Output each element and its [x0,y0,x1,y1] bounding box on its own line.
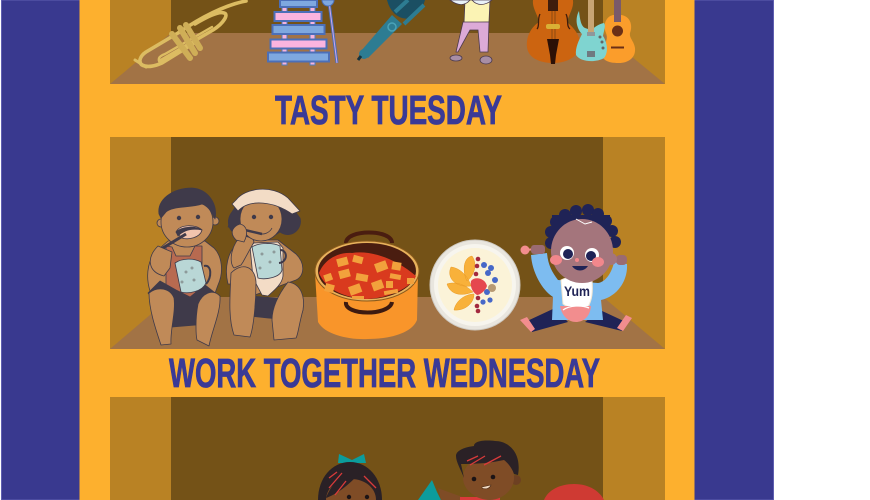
yellow bookcase frame [80,0,694,500]
icon: xylophone [268,0,337,65]
icon: double bass [527,0,580,64]
illustration: teal triangle block [418,480,441,500]
icon: microphone [358,0,425,60]
icon: trumpet [135,1,246,67]
icon: electric guitar [576,0,607,61]
panel: top shelf [110,0,665,84]
illustration: child with red hair [544,484,604,500]
heading: Work Together Wednesday: WORK TOGETHER WEDNESDAY [169,350,600,396]
illustration: baby with bib saying Yum [520,204,632,332]
heading: Tasty Tuesday: TASTY TUESDAY [275,87,502,133]
icon: bowl of porridge with fruit [430,240,520,330]
icon: pot of stew [315,232,419,339]
icon: child playing an instrument [450,0,492,64]
illustration: boy eating [148,188,221,346]
illustration: girl eating [226,189,304,340]
illustration: boy with dark hair [438,441,521,500]
illustration: girl with teal bow [318,454,382,500]
panel: middle shelf [110,137,665,349]
illustration: baby with bib saying Yum: Yum [564,283,590,299]
icon: acoustic guitar [603,0,635,63]
panel: bottom shelf [110,397,665,500]
